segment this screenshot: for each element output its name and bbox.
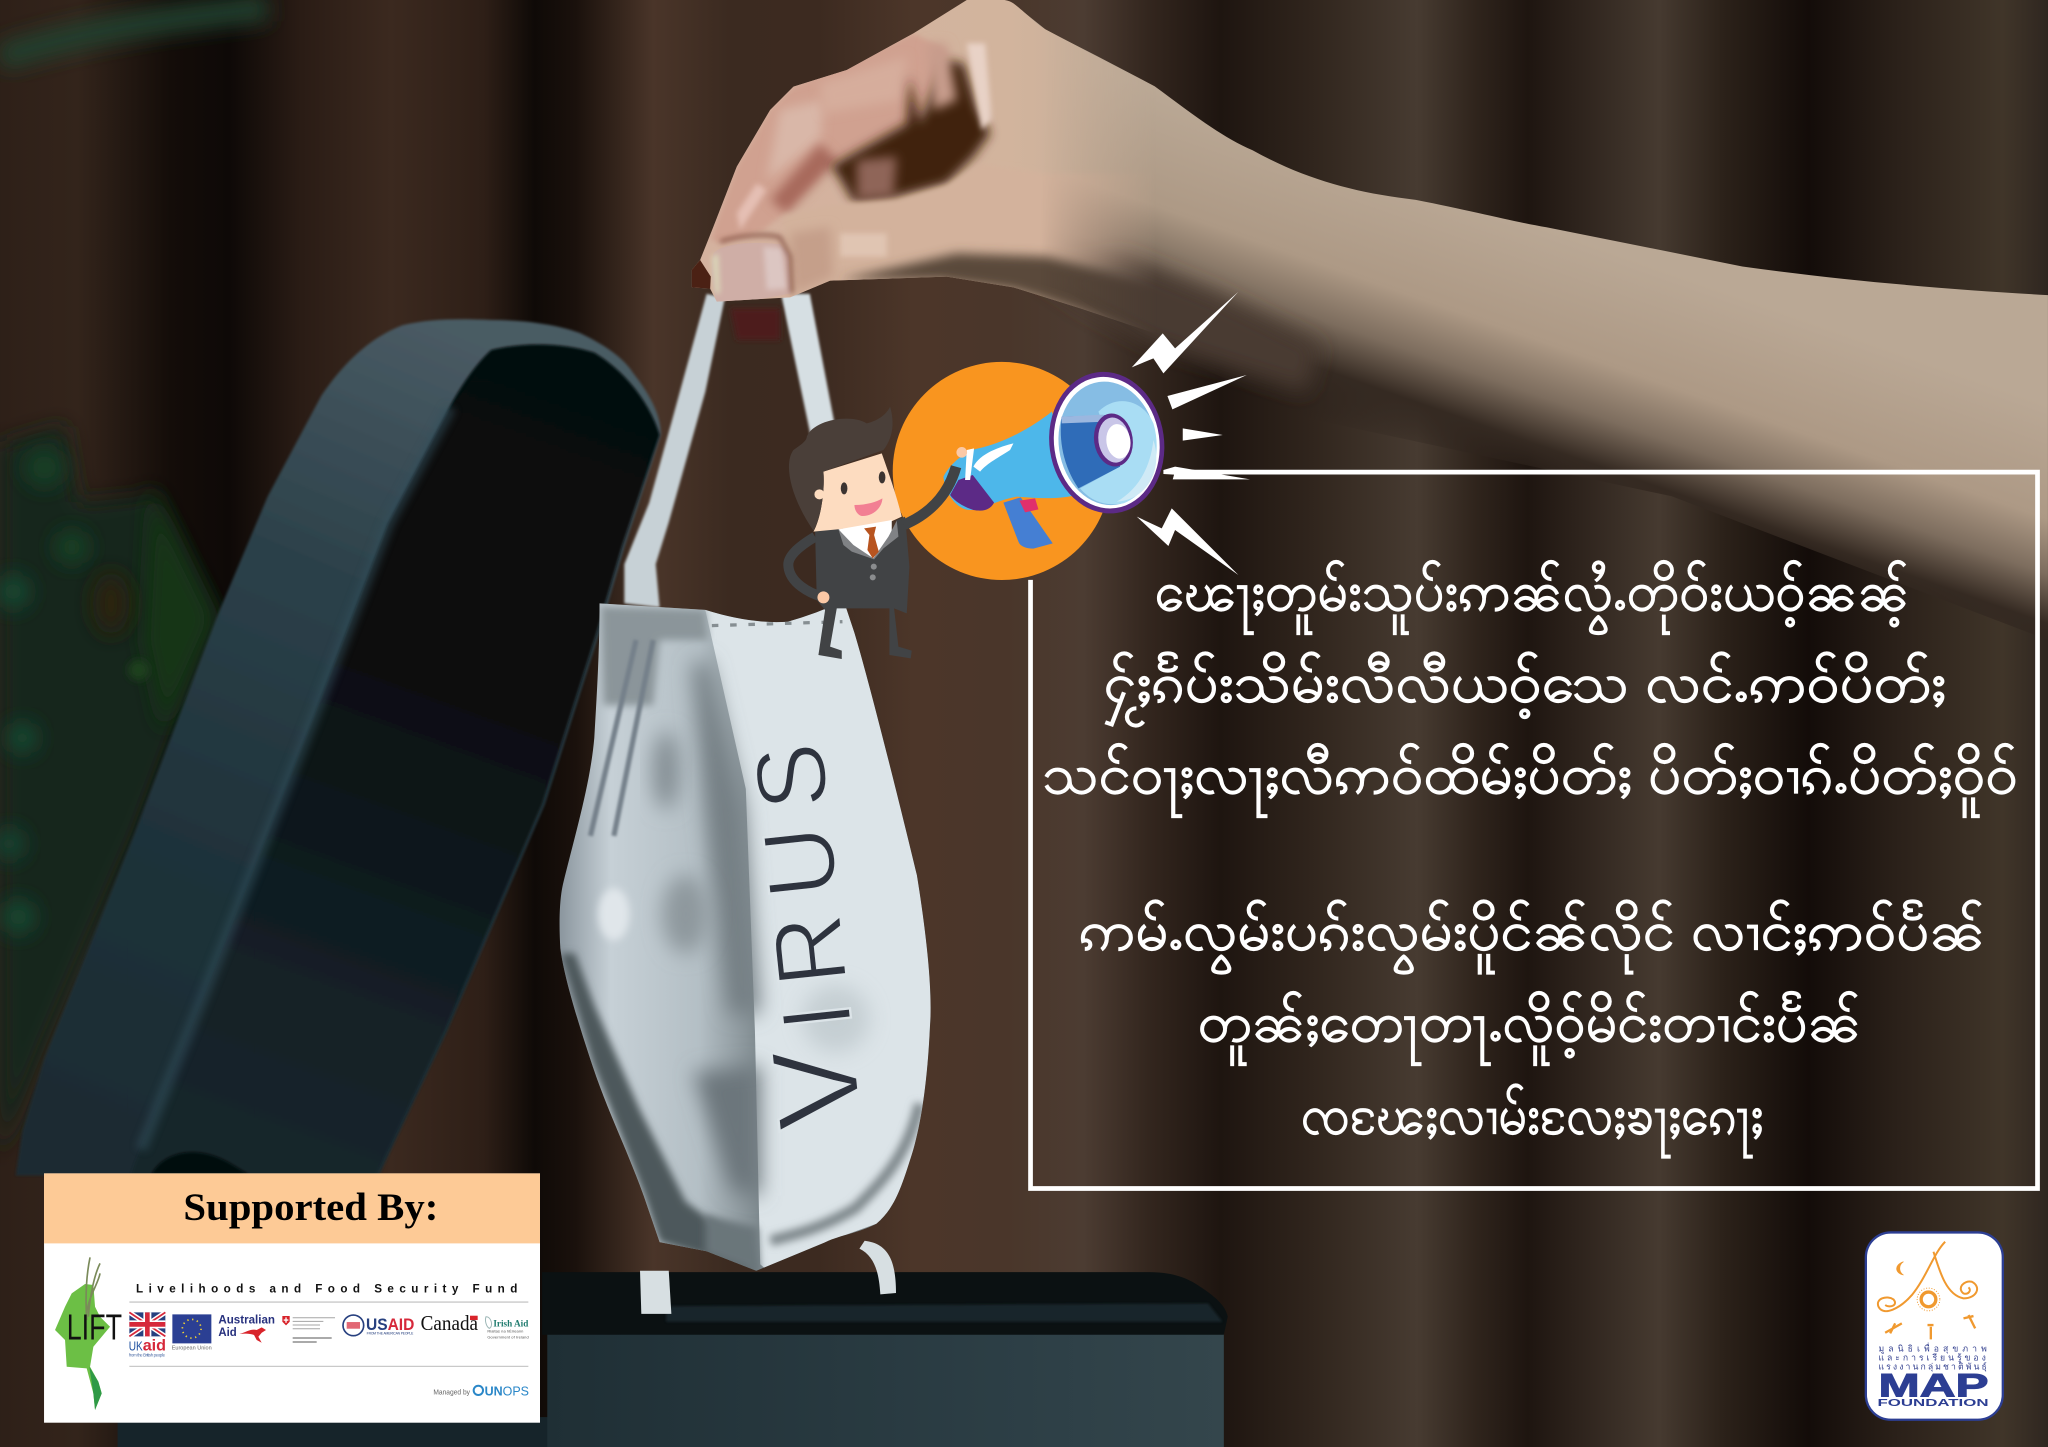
Irish Aid: Irish Aid <box>493 1319 528 1329</box>
logo Thai text: มูลนิธิเพื่อสุขภาพ <box>1878 1343 1987 1355</box>
logo wordmark: MAP <box>1878 1368 1988 1404</box>
Australian Aid <box>218 1313 275 1343</box>
gap between finger and thumb <box>830 60 990 202</box>
thumb <box>798 170 970 294</box>
Irish Aid: Rialtas na hÉireann <box>487 1329 523 1334</box>
logo Thai text: แรงงานกลุ่มชาติพันธุ์ <box>1878 1361 1987 1372</box>
USAID logo <box>343 1315 414 1336</box>
businessman <box>788 407 967 659</box>
message text in Shan: သင်ဝႃႈလႃႈလီဢဝ်ထိမ်ႈပိတ်ႈ ပိတ်ႈဝၢၵ်ႉပိတ်ႈဝိူဝ် <box>1042 742 2018 818</box>
Swiss agency <box>282 1316 335 1342</box>
message text in Shan <box>1042 559 2018 1159</box>
MAP Foundation logo: FOUNDATION <box>1877 1398 1989 1409</box>
lid notch <box>152 1152 248 1174</box>
forearm <box>1014 4 2048 640</box>
orange circle <box>893 362 1111 580</box>
managed by UNOPS <box>433 1384 529 1398</box>
message text in Shan: ႁႂ်ႈၵႅပ်းသိမ်းလီလီယဝ့်သေ လင်ႉဢဝ်ပိတ်ႈ <box>1104 650 1946 726</box>
handwritten word VIRUS: VIRUS <box>714 737 888 1135</box>
Irish Aid: Government of Ireland <box>487 1334 529 1339</box>
EU flag <box>172 1314 212 1351</box>
card heading: Supported By: <box>183 1187 438 1229</box>
MAP Foundation logo <box>1866 1232 2003 1420</box>
UK aid logo <box>129 1312 166 1358</box>
lid inner face <box>131 344 660 1175</box>
Irish Aid <box>485 1317 529 1339</box>
thumb pad <box>720 254 790 302</box>
message text in Shan: တူၼ်ႈတေႃတႃႉလိူဝ့်မိင်းတၢင်းပႅၼ် <box>1198 990 1861 1066</box>
logo Thai text: และการเรียนรู้ของ <box>1878 1352 1986 1363</box>
logo Thai text <box>1878 1343 1987 1372</box>
message text in Shan: ဢမ်ႉလွမ်းပၵ်းလွမ်းပိူင်ၼ်လိုင် လၢင်ႈဢဝ်ပႅၼ် <box>1079 899 1985 975</box>
supporters card <box>44 1173 540 1423</box>
bin body <box>118 1272 1228 1447</box>
sound rays <box>1132 292 1250 575</box>
face mask <box>560 601 931 1314</box>
wrist shadow <box>1032 256 1319 392</box>
USAID logo: FROM THE AMERICAN PEOPLE <box>367 1331 414 1335</box>
fund name: Livelihoods and Food Security Fund <box>136 1283 517 1296</box>
UK aid logo: UK <box>129 1338 143 1353</box>
LIFT logo: LIFT <box>67 1306 122 1347</box>
hand lower shadow <box>840 253 1160 337</box>
lid highlight <box>141 407 451 1149</box>
message text in Shan: ၽေႃႈတူမ်းသူပ်းဢၼ်လွႆႉတိုဝ်းယဝ့်ၼၼ့် <box>1155 559 1910 635</box>
LIFT logo <box>55 1257 122 1410</box>
background plants <box>0 8 268 1156</box>
message frame <box>1031 472 2038 1189</box>
message text in Shan: ၸၽႄႈလၢမ်းလႄႈၶႃႈၵေႃႈ <box>1301 1083 1763 1159</box>
megaphone <box>943 364 1173 549</box>
Canada wordmark: Canada <box>421 1313 478 1335</box>
mask ear loops bottom <box>640 1271 671 1314</box>
USAID logo: USAID <box>366 1315 414 1334</box>
managed by UNOPS: UNOPS <box>485 1384 529 1398</box>
EU flag: European Union <box>172 1345 212 1351</box>
index finger <box>710 33 947 243</box>
managed by UNOPS: Managed by <box>433 1389 470 1396</box>
bin lid <box>16 319 661 1175</box>
hand holding mask <box>680 0 1167 340</box>
UK aid logo: from the British people <box>129 1353 166 1358</box>
UK aid logo: aid <box>143 1337 166 1354</box>
mask front panel <box>705 601 931 1273</box>
nail below thumb <box>730 308 780 340</box>
megaphone man illustration <box>788 292 1250 659</box>
mask straps <box>624 294 836 607</box>
logo artwork <box>1878 1242 1977 1339</box>
Australian Aid: Australian <box>218 1313 275 1327</box>
Australian Aid: Aid <box>218 1325 237 1339</box>
index fingernail <box>691 260 711 289</box>
